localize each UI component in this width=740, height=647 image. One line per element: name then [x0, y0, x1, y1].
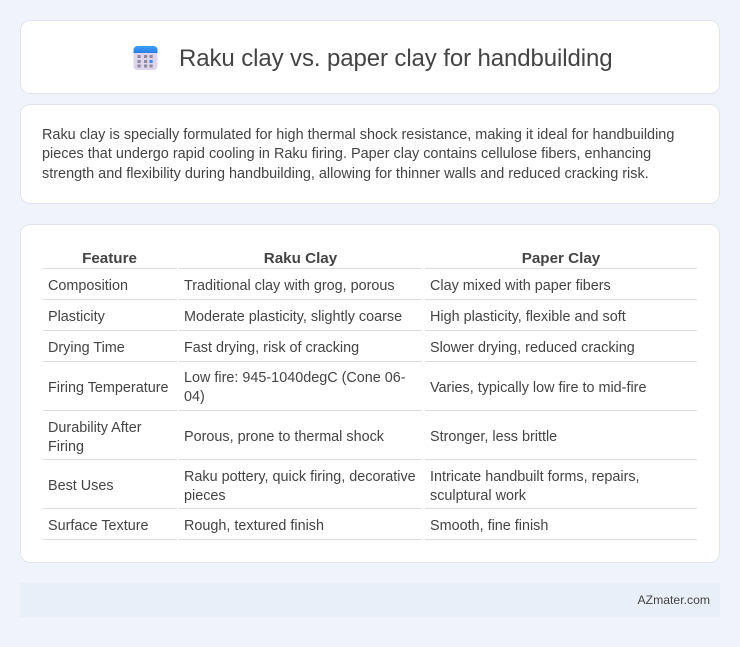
Paper uses	[430, 469, 640, 504]
Raku plasticity: Moderate plasticity, slightly coarse	[184, 309, 402, 325]
Raku firing: Low fire: 945-1040degC (Cone 06-	[184, 370, 406, 386]
footer source: AZmater.com	[638, 593, 710, 607]
intro text card	[20, 104, 720, 204]
title card	[20, 20, 720, 94]
Paper plasticity: High plasticity, flexible and soft	[430, 309, 626, 325]
Paper uses: Intricate handbuilt forms, repairs,	[430, 469, 640, 485]
column header: Raku Clay: Raku Clay	[264, 250, 337, 267]
row: Firing Temperature: Firing Temperature	[48, 380, 169, 396]
comparison table card	[20, 224, 720, 563]
Raku durability: Porous, prone to thermal shock	[184, 429, 384, 445]
row: Surface Texture: Surface Texture	[48, 518, 149, 534]
Raku composition: Traditional clay with grog, porous	[184, 278, 395, 294]
row: Composition: Composition	[48, 278, 128, 294]
intro paragraph: pieces that undergo rapid cooling in Raku firing. Paper clay contains cellulose fibers, enhancing	[42, 146, 651, 162]
Raku firing	[184, 370, 406, 405]
Raku firing: 04)	[184, 389, 205, 405]
column header: Feature: Feature	[82, 250, 137, 267]
intro paragraph: strength and flexibility during handbuilding, allowing for thinner walls and reduced cracking risk.	[42, 166, 649, 182]
row: Durability After Firing: Firing	[48, 439, 84, 455]
row: Drying Time: Drying Time	[48, 340, 125, 356]
row: Plasticity: Plasticity	[48, 309, 105, 325]
footer bar	[20, 583, 720, 617]
intro paragraph	[42, 127, 674, 182]
Paper texture: Smooth, fine finish	[430, 518, 548, 534]
Raku uses: pieces	[184, 488, 226, 504]
intro paragraph: Raku clay is specially formulated for high thermal shock resistance, making it ideal for handbuilding	[42, 127, 674, 143]
Raku texture: Rough, textured finish	[184, 518, 324, 534]
column header: Paper Clay: Paper Clay	[522, 250, 600, 267]
Raku uses	[184, 469, 416, 504]
Raku uses: Raku pottery, quick firing, decorative	[184, 469, 416, 485]
icon: calendar	[134, 46, 158, 70]
row: Durability After Firing	[48, 420, 142, 455]
row: Durability After Firing: Durability After	[48, 420, 142, 436]
Paper firing: Varies, typically low fire to mid-fire	[430, 380, 646, 396]
row: Best Uses: Best Uses	[48, 478, 114, 494]
Paper uses: sculptural work	[430, 488, 526, 504]
Paper durability: Stronger, less brittle	[430, 429, 557, 445]
Paper composition: Clay mixed with paper fibers	[430, 278, 611, 294]
Paper drying: Slower drying, reduced cracking	[430, 340, 635, 356]
Raku drying: Fast drying, risk of cracking	[184, 340, 359, 356]
title: Raku clay vs. paper clay for handbuilding	[179, 45, 612, 72]
